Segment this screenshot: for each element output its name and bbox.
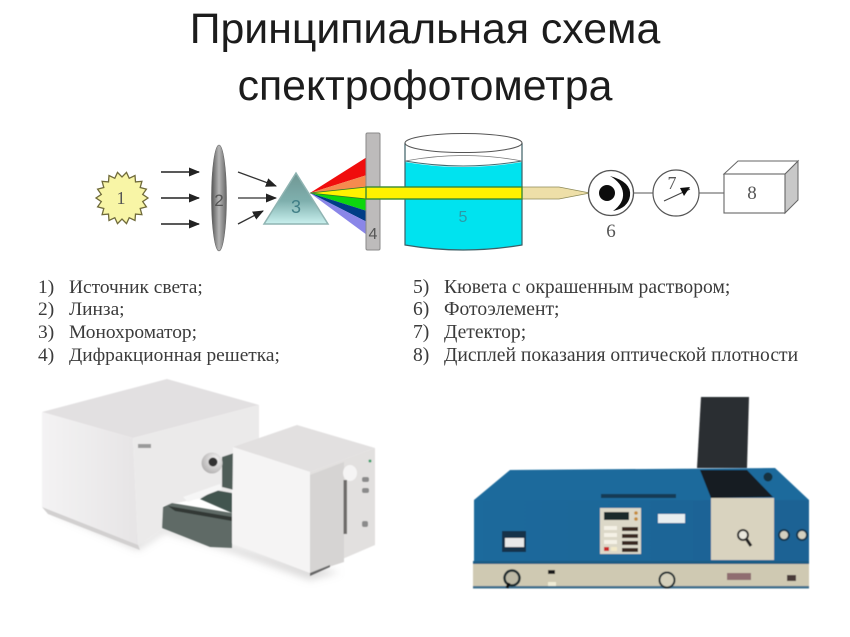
legend left column: 3) — [38, 322, 54, 343]
legend right column — [413, 277, 799, 366]
display box 8 — [724, 161, 798, 213]
diffraction grating 4: 4 — [369, 226, 378, 243]
icon: prism 3 — [264, 173, 328, 224]
legend right column: Дисплей показания оптической плотности — [444, 345, 799, 366]
connector lines — [634, 192, 724, 194]
icon: lens 2 — [212, 145, 226, 251]
arrows: lens to prism — [238, 172, 276, 224]
body top — [474, 468, 809, 500]
icon: lens 2: 2 — [214, 191, 224, 210]
legend right column: 8) — [413, 345, 429, 366]
legend right column: 5) — [413, 277, 429, 298]
white display window — [658, 514, 685, 523]
legend left column: Дифракционная решетка; — [69, 345, 280, 366]
arrows: source to lens — [161, 172, 199, 224]
photo: modern white spectrophotometer — [42, 379, 375, 580]
legend right column: Детектор; — [444, 322, 526, 343]
open lid — [697, 397, 749, 468]
left meter — [502, 531, 526, 552]
right knobs — [779, 530, 807, 540]
legend right column: 6) — [413, 299, 429, 320]
legend right column: Кювета с окрашенным раствором; — [444, 277, 730, 298]
legend left column: 2) — [38, 299, 54, 320]
small unit — [232, 425, 375, 576]
detector 7 — [653, 170, 699, 216]
photocell 6 — [588, 170, 634, 242]
beige lower strip — [473, 561, 809, 588]
title — [190, 5, 660, 110]
legend left column: Линза; — [69, 299, 125, 320]
beige compartment panel — [711, 498, 774, 560]
body front — [474, 500, 809, 563]
sample knob — [738, 530, 751, 546]
legend right column: Фотоэлемент; — [444, 299, 559, 320]
icon: prism 3: 3 — [291, 197, 301, 217]
photocell 6: 6 — [606, 221, 616, 242]
control keypad — [600, 508, 641, 554]
vent slots — [601, 494, 676, 498]
spectrum rays — [310, 157, 367, 235]
schematic diagram — [96, 133, 798, 251]
diffraction grating 4 — [366, 133, 380, 250]
legend left column: 1) — [38, 277, 54, 298]
icon: light source sun 1 — [96, 172, 148, 224]
sample compartment opening — [700, 470, 773, 498]
display box 8: 8 — [747, 183, 757, 204]
title: Принципиальная схема — [190, 5, 660, 53]
sample holder and tray — [162, 452, 234, 548]
icon: light source sun 1: 1 — [116, 188, 126, 208]
light beam — [366, 187, 590, 199]
legend right column: 7) — [413, 322, 429, 343]
knob on top — [764, 472, 772, 482]
photo: blue laboratory spectrophotometer — [473, 397, 809, 588]
legend left column: 4) — [38, 345, 54, 366]
cuvette 5 with solution: 5 — [459, 209, 468, 226]
legend left column: Монохроматор; — [69, 322, 197, 343]
cuvette 5 with solution — [405, 134, 522, 250]
detector 7: 7 — [668, 173, 676, 193]
legend left column — [38, 277, 280, 366]
legend left column: Источник света; — [69, 277, 203, 298]
title: спектрофотометра — [238, 62, 613, 110]
large unit — [42, 379, 259, 550]
